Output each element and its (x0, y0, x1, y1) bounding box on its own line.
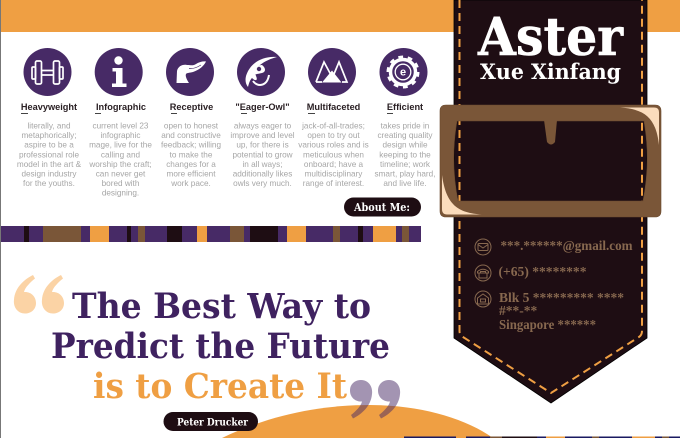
column: Infographic: designing. (102, 189, 139, 198)
icon: infographic (95, 48, 143, 96)
column: Eager-Owl: additionally likes (233, 170, 292, 178)
email address: ***.******@gmail.com (500, 238, 633, 253)
address (499, 290, 624, 332)
icon: heavyweight (24, 48, 72, 96)
column: Heavyweight: metaphorically; (21, 131, 77, 140)
about me pill: About Me: (353, 201, 410, 214)
column: Multifaceted: jack-of-all-trades; (301, 122, 365, 130)
column: Heavyweight: professional role (19, 150, 79, 159)
column: Heavyweight: model in the art & (17, 160, 82, 169)
column: Multifaceted: meticulous when (303, 150, 364, 159)
author pill (164, 412, 258, 431)
column: Efficient: creating quality (377, 131, 433, 140)
column: Efficient: design while (382, 141, 428, 150)
column: Infographic: calling and (101, 150, 141, 159)
closing quote mark (350, 380, 400, 418)
column: Efficient: smart, play hard, (375, 170, 435, 178)
column: Efficient: Efficient (387, 102, 423, 112)
icon: eager owl (237, 48, 285, 96)
column: Multifaceted: various roles and is (298, 141, 369, 150)
phone number: (+65) ******** (498, 264, 587, 279)
bottom orange arc (222, 405, 493, 438)
icon: efficient gear: e (400, 66, 406, 78)
column: Heavyweight: aspire to be a (24, 141, 74, 150)
column: Infographic: current level 23 (93, 122, 149, 130)
belt (454, 0, 647, 403)
column: Efficient: timeline; work (380, 160, 431, 169)
column: Infographic: Infographic (96, 102, 146, 112)
name: Aster (477, 7, 624, 68)
quote text line 2: Predict the Future (51, 326, 390, 367)
column: Receptive: work pace. (170, 179, 211, 188)
column: Eager-Owl: "Eager-Owl" (235, 102, 290, 112)
column: Multifaceted: range of interest. (303, 179, 364, 188)
top orange band (1, 0, 680, 32)
address: Blk 5 ********* **** (499, 290, 624, 305)
column: Receptive: Receptive (170, 102, 213, 112)
icon: multifaceted mountains (308, 48, 356, 96)
column: Infographic: infographic (100, 131, 141, 140)
column: Efficient (375, 102, 435, 188)
contact details (475, 238, 633, 332)
column: Multifaceted (298, 102, 369, 188)
column: Heavyweight: Heavyweight (21, 102, 77, 112)
column: Eager-Owl: up, for there is (236, 141, 289, 150)
column: Receptive: to make the (170, 150, 213, 159)
column: Infographic (88, 102, 152, 198)
column: Efficient: and live life. (383, 179, 427, 188)
quote text line 1: The Best Way to (72, 286, 371, 327)
column: Infographic: worship the craft; (88, 160, 152, 169)
column: Heavyweight: design industry (21, 170, 77, 178)
column: Multifaceted: multidisciplinary (305, 170, 363, 178)
column: Eager-Owl: potential to grow (232, 150, 293, 159)
icon: efficient gear (380, 48, 428, 96)
icon: email (475, 239, 491, 255)
column: Efficient: takes pride in (381, 122, 430, 130)
column: Eager-Owl: in all ways; (242, 160, 283, 169)
name: Xue Xinfang (480, 60, 621, 85)
column: Efficient: keeping to the (379, 150, 431, 159)
opening quote mark (14, 275, 64, 314)
address: Singapore ****** (499, 317, 596, 332)
author pill: Peter Drucker (177, 418, 249, 428)
striped band (1, 226, 421, 242)
quote (14, 275, 400, 418)
belt buckle (440, 105, 661, 217)
column: Heavyweight: literally, and (27, 122, 71, 130)
column: Heavyweight (17, 102, 82, 188)
address: #**-** (499, 303, 537, 318)
column: Multifaceted: onboard; have a (304, 160, 364, 169)
column: Infographic: can never get (96, 170, 146, 178)
quote text line 3: is to Create It (93, 366, 347, 407)
column: Eager-Owl: owls very much. (233, 179, 292, 188)
icon: home (475, 291, 491, 307)
bottom stripe (404, 436, 680, 438)
column: Receptive: feedback; willing (161, 141, 221, 150)
icon: phone (475, 265, 491, 281)
column: Infographic: bored with (102, 179, 140, 188)
column: Receptive: more efficient (166, 170, 216, 178)
column: Receptive (161, 102, 221, 188)
column: Eager-Owl: always eager to (234, 122, 292, 130)
column: Multifaceted: Multifaceted (307, 102, 360, 112)
column: Receptive: changes for a (166, 160, 216, 169)
column: Multifaceted: open to try out (307, 131, 360, 140)
column: Eager-Owl (230, 102, 295, 188)
about me pill (344, 198, 421, 216)
column: Receptive: and constructive (161, 131, 221, 140)
column: Heavyweight: for the youths. (23, 179, 75, 188)
column: Receptive: open to honest (164, 122, 219, 130)
column: Eager-Owl: improve and level (230, 131, 295, 140)
column: Infographic: mage, live for the (89, 141, 152, 150)
icon: receptive hand (166, 48, 214, 96)
